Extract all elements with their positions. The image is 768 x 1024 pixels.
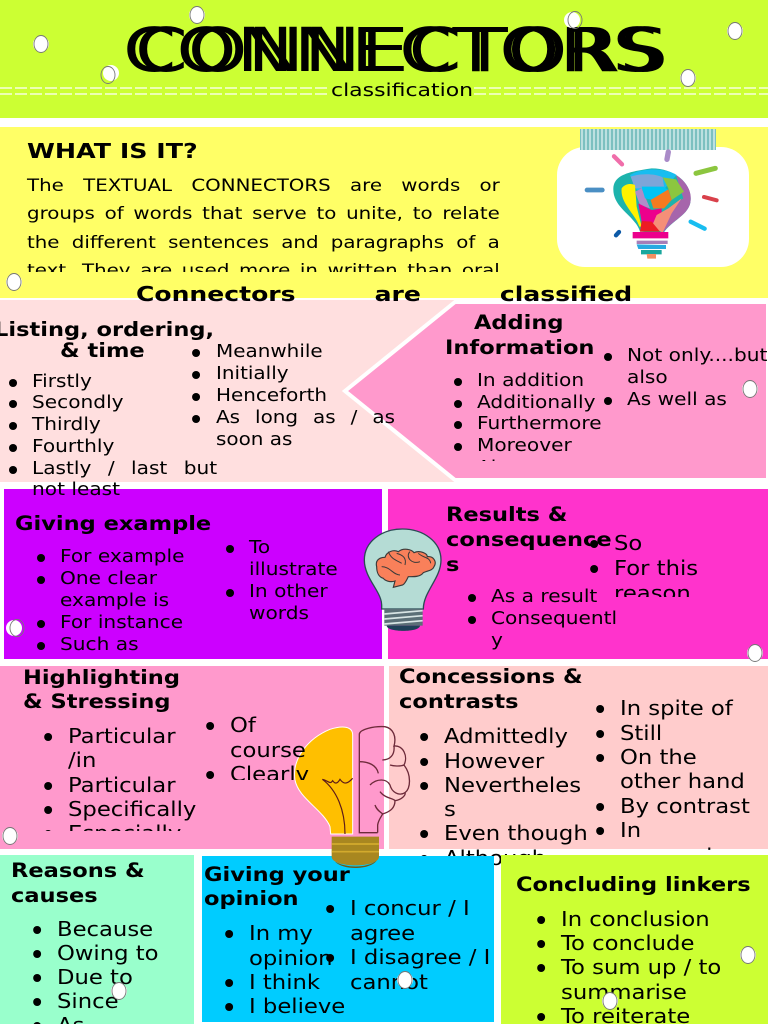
list: concessions column 1: Although (444, 846, 546, 870)
list: giving example column 2: illustrate (249, 560, 338, 580)
list: giving example column 2: In other (249, 582, 328, 602)
list: listing column 1: Thirdly (32, 415, 101, 435)
icon: colourful light bulb card (557, 129, 749, 267)
list: concluding: To sum up / to (561, 955, 721, 979)
panel: giving example (4, 489, 382, 659)
list: highlighting column 1: Specifically (68, 797, 196, 821)
list: adding column 1: Additionally (477, 393, 596, 413)
list: giving example column 1: For example (60, 547, 184, 567)
list: concessions column 2: Still (620, 721, 662, 745)
heading: adding information: Adding (474, 311, 564, 334)
list: listing column 2: soon as (216, 430, 292, 450)
panel: concluding linkers (501, 855, 768, 1024)
list: listing column 2: As long as / as (216, 408, 395, 428)
list: opinion column 1: I believe (249, 994, 345, 1018)
list: giving example column 1: Such as (60, 635, 139, 655)
heading: giving your opinion (204, 863, 350, 910)
heading: results and consequences: s (446, 553, 459, 576)
list: listing column 2: Meanwhile (216, 342, 323, 362)
list: adding column 2: As well as (627, 390, 727, 410)
list: results column 1: y (491, 631, 503, 651)
panel: reasons and causes (0, 855, 194, 1024)
heading: reasons and causes (11, 859, 145, 907)
list: concessions column 1: However (444, 749, 544, 773)
list: results column 1: Consequentl (491, 609, 617, 629)
list: listing column 1: Firstly (32, 372, 92, 392)
heading: reasons and causes: causes (11, 884, 98, 907)
list: concluding: summarise (561, 980, 687, 1004)
list: highlighting column 1: /in (68, 748, 96, 772)
list: giving example column 2: To (249, 538, 270, 558)
definition text: groups of words that serve to unite, to relate (27, 204, 500, 223)
list: concessions column 1: Admittedly (444, 724, 568, 748)
panel: highlighting and stressing (0, 666, 384, 849)
list: reasons: Since (57, 989, 119, 1013)
panel: concessions and contrasts (389, 666, 768, 849)
list: concluding: In conclusion (561, 907, 710, 931)
definition text: The TEXTUAL CONNECTORS are words or (27, 176, 500, 195)
subtitle: classification (331, 80, 473, 101)
heading: giving your opinion: Giving your (204, 863, 350, 886)
heading: concluding linkers: Concluding linkers (516, 873, 751, 896)
list: adding column 2 (604, 346, 767, 410)
list: results column 2: So (614, 531, 642, 555)
list: opinion column 1: I think (249, 970, 320, 994)
list: adding column 1 (454, 371, 602, 461)
list: highlighting column 1 (44, 724, 196, 831)
list: opinion column 2: cannot (350, 970, 428, 994)
list: opinion column 2: agree (350, 921, 415, 945)
heading: results and consequences: consequence (446, 528, 612, 551)
list: highlighting column 2: Of (230, 713, 256, 737)
list: giving example column 1: example is (60, 591, 169, 611)
list: reasons (33, 917, 159, 1024)
list: highlighting column 2: course (230, 738, 306, 762)
list: reasons: Owing to (57, 941, 159, 965)
title: CONNECTORS (123, 15, 661, 86)
panel: what is it (0, 127, 768, 298)
list: opinion column 1: In my (249, 921, 313, 945)
list: opinion column 2 (326, 896, 490, 994)
list: opinion column 1: opinion (249, 946, 333, 970)
list: concessions column 1: s (444, 797, 456, 821)
list: reasons: Because (57, 917, 153, 941)
list: results column 1: As a result (491, 587, 597, 607)
list: concessions column 2: In (620, 818, 641, 842)
heading: listing: Listing, ordering, (0, 318, 214, 341)
list: concessions column 2 (596, 696, 753, 851)
list: opinion column 2: I disagree / I (350, 945, 490, 969)
list: concessions column 2: On the (620, 745, 697, 769)
heading: giving example: Giving example (15, 512, 211, 535)
list: highlighting column 1: Particular (68, 724, 176, 748)
list: concessions column 2: In spite of (620, 696, 733, 720)
list: giving example column 1: One clear (60, 569, 157, 589)
list: opinion column 1 (225, 921, 345, 1018)
heading: connectors are classified: Connectors are classified (136, 282, 632, 306)
list: results column 2: For this (614, 556, 698, 580)
panel: results and consequences (388, 489, 768, 659)
heading: highlighting and stressing: Highlighting (23, 666, 180, 689)
heading: giving your opinion: opinion (204, 887, 299, 910)
list: listing column 1: Secondly (32, 393, 124, 413)
panel: listing, ordering and time (0, 300, 768, 482)
list: concluding (537, 907, 721, 1024)
list: adding column 1: In addition (477, 371, 584, 391)
heading: results and consequences: Results & (446, 503, 567, 526)
list: concessions column 2: other hand (620, 769, 745, 793)
list: concessions column 1: Nevertheles (444, 773, 581, 797)
list: adding column 1: Moreover (477, 436, 572, 456)
list: adding column 1: Furthermore (477, 414, 602, 434)
list: highlighting column 1: Particular (68, 773, 176, 797)
list: adding column 2: also (627, 368, 668, 388)
heading: reasons and causes: Reasons & (11, 859, 145, 882)
panel: header (0, 0, 768, 118)
definition text (26, 176, 500, 272)
heading: what is it: WHAT IS IT? (27, 139, 198, 163)
list: listing column 2: Henceforth (216, 386, 327, 406)
heading: listing: & time (60, 339, 145, 362)
list item: not least: not least (32, 480, 120, 500)
list: opinion column 2: I concur / I (350, 896, 470, 920)
list: giving example column 1: For instance (60, 613, 183, 633)
heading: concessions and contrasts: contrasts (399, 690, 519, 713)
list: listing column 1: Lastly / last but (32, 459, 217, 479)
list: giving example column 2: words (249, 604, 309, 624)
list: highlighting column 2 (206, 713, 309, 780)
heading: adding information: Information (445, 336, 594, 359)
list: reasons: Due to (57, 965, 133, 989)
definition text: the different sentences and paragraphs of a (27, 233, 500, 252)
list: listing column 2: Initially (216, 364, 289, 384)
heading: highlighting and stressing: & Stressing (23, 690, 171, 713)
heading: concessions and contrasts: Concessions & (399, 665, 583, 688)
list: results column 2 (590, 531, 698, 597)
list: listing column 1: Fourthly (32, 437, 114, 457)
list: adding column 2: Not only....but (627, 346, 767, 366)
title: CONNECTORS (135, 15, 668, 86)
panel: giving your opinion (202, 856, 494, 1022)
list: concluding: To conclude (561, 931, 694, 955)
list: concessions column 2: By contrast (620, 794, 750, 818)
list: concessions column 1: Even though (444, 821, 588, 845)
